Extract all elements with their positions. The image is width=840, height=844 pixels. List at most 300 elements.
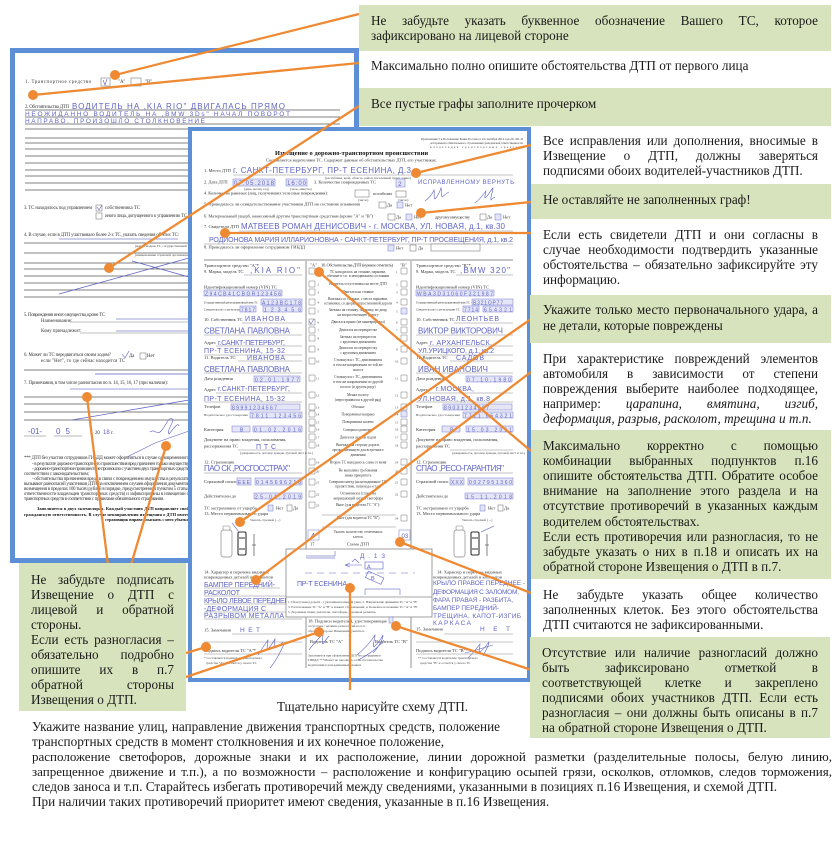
vehicle A column: Документ на право владения, пользования, — [204, 437, 286, 443]
text block: scheme instructions: следов заноса и т.п. Старайтесь избегать противоречий между сведениями, указанными в позициях п.16 Извещения, и схемой ДТП. — [32, 779, 777, 794]
checklist: item 16 circumstances: полосе (в другом ряду) — [340, 385, 376, 389]
panel: front side of the form: Нет — [414, 214, 421, 220]
heading: draw the scheme: Тщательно нарисуйте схему ДТП. — [277, 699, 468, 714]
panel: front side of the form: Нет — [503, 214, 510, 220]
vehicle A column: 25.01.2019 — [255, 494, 301, 500]
checklist: item 16 circumstances: 10 — [395, 360, 399, 364]
pointer: circumstances first person — [28, 63, 359, 100]
pointer: count of cells — [395, 537, 531, 593]
callout: disagreements — [530, 637, 830, 738]
callout: item 16 circumstances: отсутствие противоречий в указанных каждым — [543, 498, 818, 513]
checklist: item 16 circumstances: Столкнулся с ТС, двигавшимся — [334, 375, 382, 380]
checklist: item 16 circumstances: 17 — [395, 436, 399, 440]
callout: corrections: подписями обоих водителей-участников ДТП. — [543, 163, 803, 178]
panel: front side of the form: 2 — [398, 181, 402, 188]
checklist: item 16 circumstances: Двигался на перекрестке — [339, 328, 377, 332]
diagram: accident scheme: 5. Дорожные знаки, указатели, светофоры, дорожная разметка. — [288, 610, 376, 615]
callout: damage character: например: царапина, вмятина, изгиб, — [543, 396, 818, 411]
diagram: accident scheme: 1. План (схема) дороги - с указанием названий улиц. 2. Направление движения ТС "А" и "В" — [288, 600, 418, 604]
item 18: signatures: 18. Подписи водителей, удостоверяющие — [308, 618, 387, 624]
vehicle B column: Государственный регистрационный знак ТС — [416, 300, 471, 304]
vehicle A column: Дата рождения — [204, 376, 233, 381]
panel: reverse side of the form: НАПРАВО. ПРОИЗОШЛО СТОЛКНОВЕНИЕ — [25, 118, 206, 125]
item 18: signatures: обратной стороне Извещения (указать п. — [308, 629, 365, 633]
checklist: item 16 circumstances: 13 — [395, 406, 399, 410]
vehicle A column: 01.02.2016 — [254, 428, 301, 434]
checklist: item 16 circumstances: движения — [351, 453, 366, 457]
checklist: item 16 circumstances: Водитель отсутствовал на месте ДТП — [329, 282, 387, 286]
checklist: item 16 circumstances: (перестраивался в другой ряд) — [335, 398, 382, 402]
vehicle A column: ПТС — [256, 444, 276, 451]
vehicle A column: ПАО СК ,РОСГОССТРАХ" — [204, 464, 290, 473]
panel: front side of the form: МАТВЕЕВ РОМАН ДЕНИСОВИЧ - г. МОСКВА, УЛ. НОВАЯ, д.1, кв.30 — [241, 222, 506, 231]
panel: reverse side of the form: гражданскую ответственность. В случае ненаправления извещения о ДТП имеет — [24, 512, 190, 517]
checklist: item 16 circumstances: 12 — [316, 394, 320, 398]
vehicle B column: 12. Страховщик — [416, 460, 447, 464]
checklist: item 16 circumstances: 4 — [318, 300, 320, 304]
vehicle A column: Категория — [204, 427, 224, 432]
text block: scheme instructions: транспортных средств в момент столкновения и их конечное положение, — [32, 734, 444, 749]
checklist: item 16 circumstances: 19 — [395, 460, 399, 464]
checklist: item 16 circumstances: 12 — [395, 394, 399, 398]
callout: item 16 circumstances: забудьте указать о них в п.18 и описать их на — [543, 544, 818, 559]
panel: front side of the form: г. САНКТ-ПЕТЕРБУРГ, ПР-Т ЕСЕНИНА, Д.3 — [233, 166, 412, 175]
panel: reverse side of the form: 6. Может ли ТС передвигаться своим ходом? — [24, 353, 111, 358]
vehicle B column: поврежденных деталей и элементов — [433, 574, 502, 580]
panel: front side of the form: ИСПРАВЛЕННОМУ ВЕРНУТЬ — [418, 180, 514, 186]
diagram: accident scheme: B — [371, 576, 375, 582]
vehicle B column: ЛЕОНТЬЕВ — [456, 316, 499, 323]
panel: front side of the form: 1. Место ДТП — [204, 168, 232, 173]
checklist: item 16 circumstances: Не выполнил требования — [339, 468, 378, 472]
pointer: empty fields dash — [104, 106, 359, 273]
checklist: item 16 circumstances: 20 — [316, 470, 320, 474]
vehicle A column: поврежденных деталей и элементов — [204, 574, 273, 580]
callout: sign the form: опишите их в п.7 — [31, 662, 174, 677]
vehicle B column: 7711 654321 — [464, 414, 512, 420]
panel: reverse side of the form: г. — [111, 431, 114, 436]
checklist: item 16 circumstances: 14 — [395, 412, 399, 416]
pointer: first impact place — [235, 319, 531, 527]
checklist: item 16 circumstances: 5 — [396, 310, 398, 314]
vehicle A column: 15. Замечания — [204, 628, 231, 632]
vehicle B column: средства "В" и остается у своего ТС — [420, 661, 471, 665]
vehicle A column: НЕТ — [240, 627, 260, 634]
checklist: item 16 circumstances: 15 — [395, 420, 399, 424]
checklist: item 16 circumstances: на второстепенную дорогу — [337, 313, 379, 317]
callout: vehicle letter: Не забудьте указать буквенное обозначение Вашего ТС, которое — [371, 12, 818, 28]
vehicle A column: Действителен до — [204, 494, 237, 498]
panel: reverse side of the form: 20 — [95, 431, 100, 436]
checklist: item 16 circumstances: Схема ДТП — [347, 542, 370, 546]
panel: reverse side of the form: - в результате дорожно-транспортного происшествия вред причинен только имуществу — [32, 462, 190, 467]
callout: disagreements: разногласия – они должны быть описаны в п.7 — [542, 705, 818, 720]
checklist: item 16 circumstances: Указать количество отмеченных — [333, 530, 383, 534]
panel: reverse side of the form: транспортных средств в соответствии с правилами обязательного страхования. — [24, 497, 164, 502]
pointers: orange callout lines with dots — [28, 14, 535, 690]
callout: sign the form: обратной стороны — [31, 677, 174, 692]
vehicle B column: ХХХ — [451, 480, 464, 486]
panel: front side of the form: Нет — [396, 246, 403, 250]
checklist: item 16 circumstances: с круговым движением — [340, 351, 376, 355]
vehicle B column: Категория — [416, 427, 436, 432]
vehicle A column: ТС застраховано от ущерба — [204, 506, 257, 510]
vehicle B column: Действителен до — [416, 494, 449, 498]
vehicle A column: РАСКОЛОТ — [204, 590, 241, 597]
checklist: item 16 circumstances: клеток — [353, 535, 363, 539]
panel: reverse side of the form: Кому принадлежит: — [41, 329, 81, 334]
vehicle A column: 9. Марка, модель ТС — [204, 269, 244, 275]
panel: reverse side of the form: "В" — [145, 80, 152, 85]
checklist: item 16 circumstances: 1 — [318, 270, 320, 274]
panel: front side of the form: (число) — [398, 198, 408, 202]
vehicle B column: 15.03.2011 — [467, 428, 512, 434]
panel: reverse side of the form: *** ДТП без участия сотрудников ГИБДД может оформляться в случае одновременного — [24, 456, 190, 461]
vehicle B column: УЛ.НОВАЯ, д.1, кв.8 — [418, 396, 490, 403]
callout: witnesses: обстоятельства – обязательно зафиксируйте эту — [543, 257, 818, 272]
panel: front side of the form: (число) — [358, 198, 368, 202]
vehicle B column: Нет — [488, 506, 495, 510]
checklist: item 16 circumstances: знака приоритета — [345, 474, 372, 478]
panel: reverse side of the form: ответственности владельцев транспортных средств) и зафиксированы в извещении о — [24, 492, 190, 497]
text block: scheme instructions: расположение светофоров, дорожные знаки и их расположение, линии дорожной разметки (разделительные полосы, белую линию, — [32, 749, 832, 764]
vehicle B column: Страховой полис — [416, 479, 449, 484]
callout: first impact: Укажите только место первоначального удара, а — [543, 302, 818, 316]
panel: reverse side of the form: "А" — [118, 80, 125, 85]
panel: reverse side of the form: - обстоятельства причинения вреда в связи с повреждением имущества в результате — [32, 477, 189, 482]
callout: corrections: Все исправления или дополнения, вносимые в — [543, 132, 818, 148]
icon: vehicle outlines B — [454, 526, 494, 557]
callout: witnesses — [531, 219, 831, 295]
diagram: accident scheme: A — [367, 564, 371, 570]
panel: reverse side of the form: вызывают разногласий участников ДТП (за исключением случаев оформления документов — [24, 482, 190, 487]
vehicle B column: 10. Собственник ТС — [416, 317, 455, 322]
text block: scheme instructions: При наличии таких противоречий приоритет имеют сведения, указанные в п.16 Извещения. — [32, 794, 549, 809]
vehicle B column: Водительское удостоверение — [416, 413, 461, 417]
callout: item 16 circumstances: внимание на заполнение этого раздела и на — [543, 483, 818, 498]
vehicle A column: Страховой полис — [204, 479, 237, 484]
checklist: item 16 circumstances: 4 — [311, 533, 315, 540]
vehicle A column: г.САНКТ-ПЕТЕРБУРГ, — [218, 340, 285, 347]
checklist: item 16 circumstances: полосе — [353, 368, 364, 372]
callout: item 16 circumstances — [531, 430, 831, 579]
callout: witnesses: случае необходимости подтвердить указанные — [543, 242, 818, 257]
panel: reverse side of the form: страховщик вправе взыскать с него убытки — [105, 517, 189, 522]
vehicle B column: Адрес — [416, 387, 428, 392]
checklist: item 16 circumstances: 8 — [318, 336, 320, 340]
panel: reverse side of the form: НЕОЖИДАННО ВОДИТЕЛЬ НА ,BMW 3Ds" НАЧАЛ ПОВОРОТ — [25, 111, 290, 118]
checklist: item 16 circumstances: 3 — [396, 290, 398, 294]
vehicle A column: ПР-Т ЕСЕНИНА, 15-32 — [204, 396, 285, 403]
callout: sign the form: лицевой и обратной — [31, 602, 174, 617]
checklist: item 16 circumstances: Двигался задним ходом — [340, 436, 377, 440]
checklist: item 16 circumstances: Совершил наезд (на неподвижное ТС, — [329, 480, 387, 485]
panel: front side of the form: РОДИОНОВА МАРИЯ ИЛЛАРИОНОВНА - САНКТ-ПЕТЕРБУРГ, ПР-Т ПРОСВЕЩЕНИЯ, д.1, кв.2 — [209, 237, 513, 244]
panel: reverse side of the form: если "Нет", то где сейчас находится ТС — [41, 359, 125, 364]
callout: witnesses: Если есть свидетели ДТП и они согласны в — [543, 226, 818, 242]
checklist: item 16 circumstances: запрещающий сигнал светофора — [333, 496, 383, 500]
checklist: item 16 circumstances: 10 — [316, 360, 320, 364]
vehicle B column: ** Составляется водителем транспортного — [418, 656, 478, 660]
text block: scheme instructions: Укажите название улиц, направление движения транспортных средств, положение — [32, 719, 500, 734]
panel: front side of the form — [188, 127, 531, 682]
callout: vehicle letter — [359, 5, 831, 51]
checklist: item 16 circumstances: 21 — [316, 480, 320, 484]
checklist: item 16 circumstances: 22 — [316, 492, 320, 496]
diagram: accident scheme — [286, 549, 432, 617]
item 18: signatures: ГИБДД ***Может не заполнять, если обстоятельства — [308, 658, 383, 663]
pointer: notes item 7 — [82, 392, 108, 565]
checklist: item 16 circumstances: Совершал разворот — [343, 428, 373, 432]
item 18: signatures: Заполняется при оформлении ДТП без сотрудников — [308, 654, 381, 658]
vehicle A column: Государственный регистрационный знак ТС — [204, 300, 259, 304]
pointer: vehicle letter — [110, 14, 359, 80]
checklist: item 16 circumstances: 8 — [396, 336, 398, 340]
checklist: item 16 circumstances: в том же направлении по той же — [333, 363, 383, 367]
pointer: witnesses — [220, 228, 531, 238]
vehicle A column: * Составляется водителем транспортного — [204, 656, 263, 660]
pointer: item 16 — [314, 267, 531, 451]
callout: describe circumstances — [359, 51, 831, 88]
item 18: signatures: Водитель ТС "А" — [310, 639, 343, 644]
callout: witnesses: информацию. — [543, 272, 620, 287]
text block: scheme instructions — [32, 719, 832, 809]
diagram: accident scheme: 3. Расположение ТС "А" и "В" в момент столкновения. 4. Конечное положение ТС "А" и "В" — [288, 605, 419, 609]
checklist: item 16 circumstances: 16 — [316, 428, 320, 432]
checklist: item 16 circumstances: 15 — [316, 420, 320, 424]
panel: front side of the form: другому имуществу — [435, 214, 471, 220]
checklist: item 16 circumstances: Поворачивал направо — [341, 412, 375, 416]
panel: reverse side of the form: 7. Примечания, в том числе разногласия по п. 14, 15, 16, 17 (при наличии): — [24, 381, 168, 386]
vehicle B column: 15. Замечания — [416, 626, 443, 632]
panel: front side of the form: 07.05.2018 — [234, 181, 275, 187]
vehicle B column: ТС застраховано от ущерба — [416, 506, 469, 510]
item 18: signatures: Водитель ТС "В" — [375, 639, 408, 644]
panel: reverse side of the form — [10, 48, 359, 563]
vehicle A column: КРЫЛО ЛЕВОЕ ПЕРЕДНЕЕ — [204, 598, 289, 605]
checklist: item 16 circumstances: Столкнулся с ТС, двигавшимся — [334, 358, 382, 363]
callout: disagreements: Отсутствие или наличие разногласий должно — [542, 644, 818, 660]
checklist: item 16 circumstances: Остановился (стоял) на — [340, 492, 376, 496]
vehicle A column: (доверенность, договор аренды, путевой лист и т.п.) — [240, 451, 313, 456]
checklist: item 16 circumstances: Выезжал со стоянки, с места парковки, — [328, 297, 388, 302]
callout: item 16 circumstances: обратной стороне Извещения о ДТП в п.7. — [543, 559, 781, 574]
pointer: no blank fields — [416, 202, 531, 218]
callout: corrections — [531, 126, 831, 184]
checklist: item 16 circumstances: 2 — [318, 282, 320, 286]
callout: number of cells: Не забудьте указать общее количество — [543, 586, 818, 602]
checklist: item 16 circumstances: 17 — [316, 436, 320, 440]
vehicle A column: РАЗРЫВОМ МЕТАЛЛА — [204, 613, 284, 620]
panel: reverse side of the form: иного лица, допущенного к управлению ТС — [105, 214, 187, 219]
vehicle A column: Указать стрелкой (→) — [250, 518, 280, 522]
callout: damage character: автомобиля в зависимости от степени — [543, 366, 818, 381]
panel: reverse side of the form: -01- — [28, 427, 42, 436]
item 18: signatures: водителями в разъединенных бланках — [308, 663, 362, 667]
vehicle B column: Указать стрелкой (→) — [462, 518, 492, 522]
vehicle A column: 7817 — [241, 308, 255, 314]
callout: disagreements: быть зафиксировано отметкой в — [542, 660, 818, 675]
callout: damage character: деформация, разрыв, расколот, трещина и т.п. — [543, 411, 812, 426]
vehicle B column: 13. Место первоначального удара — [416, 511, 480, 516]
vehicle B column: 9. Марка, модель ТС — [416, 269, 456, 275]
checklist: item 16 circumstances: 18 — [395, 444, 399, 448]
callout: item 16 circumstances: комбинации выбранных подпунктов п.16 — [543, 453, 818, 468]
vehicle B column: г. АРХАНГЕЛЬСК, — [430, 340, 492, 347]
callout: empty fields: Все пустые графы заполните прочерком — [371, 96, 596, 110]
vehicle A column: Свидетельство о регистрации ТС — [204, 308, 249, 312]
panel: front side of the form: 3. Количество поврежденных ТС — [314, 180, 376, 184]
checklist: item 16 circumstances: 21 — [395, 480, 399, 484]
panel: reverse side of the form: 2. Обстоятельства ДТП — [25, 105, 70, 110]
vehicle A column: ПР-Т ЕСЕНИНА, 15-32 — [204, 348, 285, 355]
callout: disagreements: подписями обоих участников ДТП. Если есть — [542, 690, 818, 705]
checklist: item 16 circumstances: 23 — [316, 504, 320, 508]
checklist: item 16 circumstances: Менял полосу — [347, 393, 369, 397]
vehicle B column: Да — [504, 506, 509, 510]
checklist: item 16 circumstances: предназначенную для встречного — [332, 448, 384, 452]
vehicle B column: САДОВ — [456, 355, 484, 362]
diagram: accident scheme: Д.13 — [360, 553, 385, 560]
panel: front side of the form: Да — [418, 246, 423, 250]
panel: front side of the form: погибших — [373, 191, 393, 196]
vehicle A column: А123ВС178 — [262, 300, 301, 306]
checklist: item 16 circumstances: "А" — [310, 262, 317, 268]
vehicle A column: 7811 123456 — [251, 414, 301, 420]
item 18: signatures — [308, 617, 408, 667]
checklist: item 16 circumstances: препятствие, пешехода и т.п.) — [335, 484, 381, 490]
panel: front side of the form: (день, месяц, год) — [244, 187, 269, 192]
vehicle B column: 11. Водитель ТС — [416, 355, 448, 360]
vehicle A column: ИВАНОВА — [247, 355, 285, 362]
callout: item 16 circumstances: Максимально корректно с помощью — [543, 438, 818, 452]
vehicle A column: Адрес — [204, 387, 216, 392]
checklist: item 16 circumstances: Выезжал на сторону дороги, — [336, 443, 380, 448]
checklist: item 16 circumstances: 11 — [395, 376, 399, 380]
callout: sign the form: Если есть разногласия – — [31, 632, 174, 647]
callout: damage character — [531, 343, 831, 430]
vehicle B column: ФАРА ПРАВАЯ - РАЗБИТА, — [433, 597, 513, 604]
checklist: item 16 circumstances — [308, 262, 410, 546]
vehicle B column: 89031234567 — [444, 406, 489, 412]
pointer: reverse signature — [131, 441, 171, 565]
pointer: driver signature A — [186, 642, 211, 653]
vehicle A column: Транспортное средство "А"* — [204, 263, 260, 268]
vehicle B column — [416, 263, 525, 665]
checklist: item 16 circumstances: в том же направлении по другой — [333, 380, 383, 384]
callout: sign the form: Извещение о ДТП с — [31, 587, 174, 602]
checklist: item 16 circumstances: 6 — [318, 320, 320, 324]
panel: reverse side of the form: 4. В случае, если в ДТП участвовало более 2-х ТС, указать сведения об этих ТС: — [24, 233, 179, 238]
callout: describe circumstances: Максимально полно опишите обстоятельства ДТП от первого лица — [371, 58, 748, 72]
panel: reverse side of the form: (наименование страховой организации — [135, 253, 190, 257]
panel: front side of the form: 5. Проводилось ли освидетельствование участников ДТП на состояние опьянения — [204, 202, 360, 206]
panel: reverse side of the form: Заполняется в двух экземплярах. Каждый участник ДТП направляет свой — [37, 506, 189, 511]
panel: reverse side of the form: ВОДИТЕЛЬ НА ,KIA RIO" ДВИГАЛАСЬ ПРЯМО — [72, 102, 285, 111]
checklist: item 16 circumstances: 3 — [318, 290, 320, 294]
panel: front side of the form: Извещение о дорожно-транспортном происшествии — [275, 150, 428, 157]
vehicle B column: ТРЕЩИНА, КАПОТ-ИЗГИБ — [433, 613, 521, 620]
vehicle A column: ЕЕЕ — [238, 480, 251, 486]
panel: front side of the form: 7. Свидетели ДТП — [204, 224, 240, 229]
vehicle B column: Документ на право владения, пользования, — [416, 437, 498, 443]
panel: front side of the form: 6. Материальный ущерб, нанесенный другим транспортным средствам (кроме "А" и "В") — [204, 214, 374, 220]
vehicle A column: средства "А" и остается у своего ТС — [206, 661, 258, 665]
vehicle B column: 7714 — [464, 308, 478, 314]
panel: reverse side of the form: Наименование: — [41, 319, 72, 324]
checklist: item 16 circumstances: 03 — [402, 534, 409, 540]
callout: number of cells: ДТП считаются не зафиксированными. — [543, 617, 763, 632]
vehicle A column: 12. Страховщик — [204, 460, 235, 464]
vehicle A column: ИВАНОВА — [245, 316, 285, 323]
vehicle A column: ,KIA RIO" — [250, 266, 300, 275]
vehicle A column: Z94CB41CBGR123456 — [205, 292, 281, 298]
vehicle B column: Транспортное средство "В"* — [416, 263, 471, 268]
pointer: corrections signed — [411, 145, 531, 178]
callout: disagreements: соответствующей клетке и закреплено — [542, 675, 818, 690]
vehicle A column — [204, 263, 313, 668]
callout: sign the form: Не забудьте подписать — [31, 572, 174, 586]
panel: reverse side of the form: 18 — [103, 430, 110, 436]
checklist: item 16 circumstances: 19 — [316, 460, 320, 464]
panel: reverse side of the form: Нет — [147, 354, 156, 359]
panel: front side of the form: «О правилах обязательного страхования гражданской ответственности — [430, 141, 523, 145]
panel: front side of the form: 16:00 — [287, 181, 307, 187]
vehicle A column: В — [240, 428, 244, 434]
panel: front side of the form: (часы, минуты) — [290, 187, 312, 192]
checklist: item 16 circumstances: с круговым движением — [340, 340, 376, 344]
callout: vehicle letter: зафиксировано на лицевой стороне — [371, 28, 569, 43]
checklist: item 16 circumstances: Двигался прямо (не маневрировал) — [331, 320, 386, 324]
callout: item 16 circumstances: водителем обстоятельствах. — [543, 514, 700, 529]
vehicle B column: ВИКТОР ВИКТОРОВИЧ — [418, 326, 503, 336]
item 18: signatures: отсутствие / наличие разногласий по п.п. — [308, 624, 366, 628]
vehicle B column: СПАО ,РЕСО-ГАРАНТИЯ" — [416, 464, 504, 473]
vehicle A column: 13. Место первоначального удара — [204, 511, 268, 516]
panel: reverse side of the form: - дорожно-транспортное происшествие произошло с участием двух транспортных средств — [32, 467, 190, 472]
vehicle B column: В321ОР77 — [473, 300, 503, 306]
vehicle A column: СВЕТЛАНА ПАВЛОВНА — [204, 365, 291, 374]
panel: front side of the form: Составляется водителями ТС. Содержит данные об обстоятельствах ДТП, его участниках. — [266, 158, 437, 164]
panel: front side of the form: владельцев транспортных средств» — [430, 145, 523, 149]
vehicle A column: Адрес — [204, 340, 216, 345]
panel: front side of the form: 4. Количество раненых (лиц, получивших телесные повреждения): — [204, 190, 328, 196]
panel: front side of the form: Да — [387, 202, 392, 208]
checklist: item 16 circumstances: 18 — [316, 444, 320, 448]
vehicle A column: СВЕТЛАНА ПАВЛОВНА — [204, 326, 291, 336]
vehicle B column: распоряжения ТС — [416, 444, 450, 448]
callout: disagreements: на обратной стороне Извещения о ДТП. — [542, 720, 767, 735]
panel: reverse side of the form: собственника ТС — [105, 206, 140, 211]
callout: sign the form: обязательно подробно — [31, 647, 174, 662]
callout: damage character: повреждения выберите наиболее подходящее, — [543, 381, 818, 396]
panel: front side of the form: 8. Проводилось ли оформление сотрудником ГИБДД — [204, 244, 305, 250]
callout: empty fields — [359, 88, 831, 126]
vehicle B column: 654321 — [484, 308, 512, 314]
checklist: item 16 circumstances: 1 — [396, 270, 398, 274]
panel: reverse side of the form: 5. Повреждения иного имущества, кроме ТС — [24, 313, 105, 318]
callout: sign the form: стороны. — [31, 617, 81, 632]
icon: vehicle outlines A — [221, 523, 256, 557]
checklist: item 16 circumstances: 20 — [395, 470, 399, 474]
checklist: item 16 circumstances: 24 — [395, 516, 399, 520]
checklist: item 16 circumstances: 2 — [396, 282, 398, 286]
callout: number of cells — [531, 579, 831, 637]
vehicle A column: 0145696218 — [256, 480, 301, 486]
checklist: item 16 circumstances: обочине и т.п. в неподвижном состоянии — [327, 274, 389, 278]
callout: sign the form — [19, 563, 186, 711]
checklist: item 16 circumstances: Заезжал на стоянку, парковку, во двор, — [329, 308, 387, 313]
